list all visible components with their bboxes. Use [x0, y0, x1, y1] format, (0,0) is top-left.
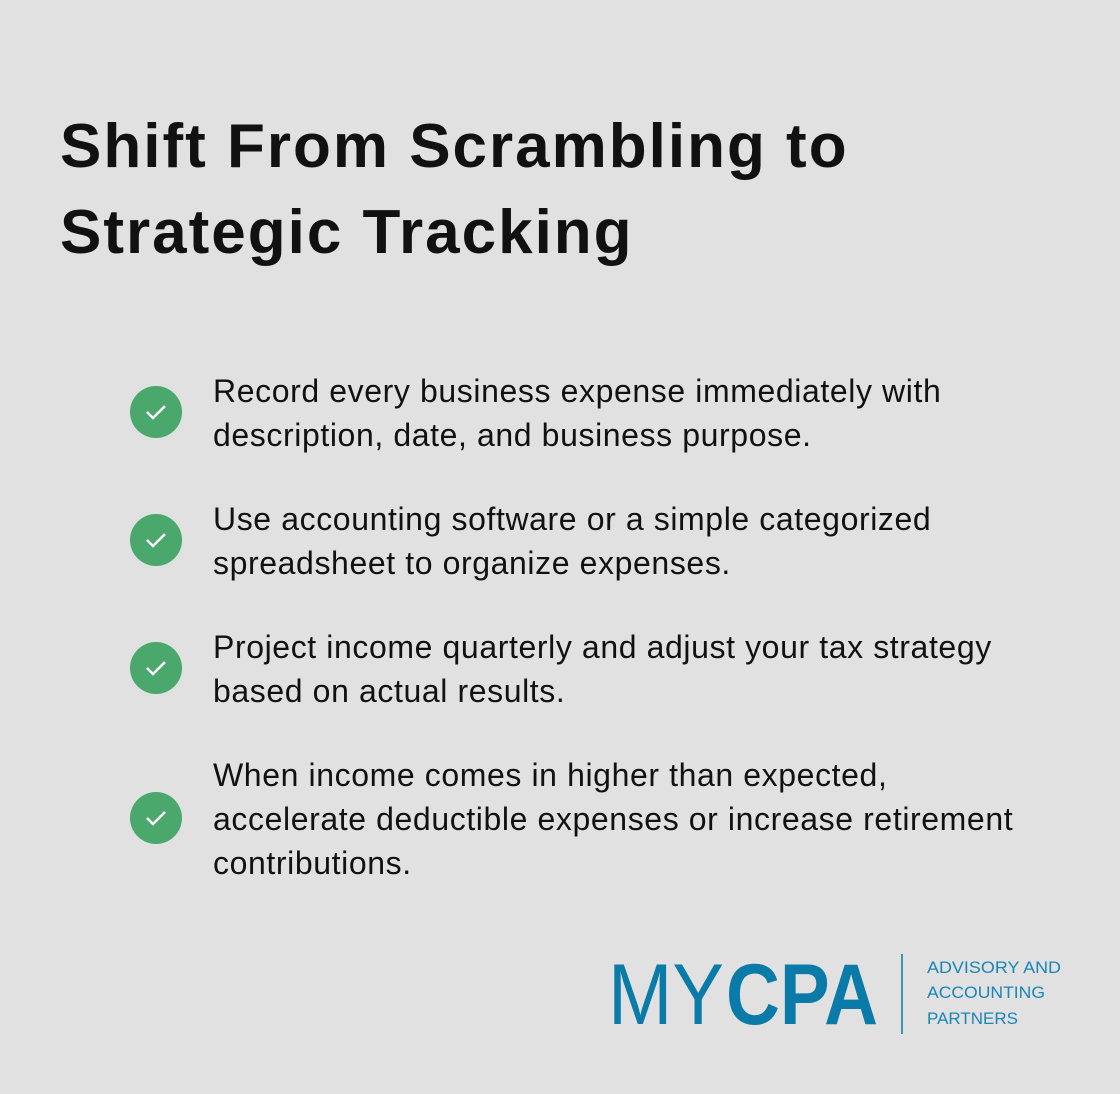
- title: Strategic Tracking: [60, 198, 634, 267]
- item 4: [130, 757, 1013, 881]
- title: Shift From Scrambling to: [60, 112, 849, 181]
- text: [213, 757, 1013, 881]
- title: [60, 112, 849, 267]
- icon: check: [130, 386, 182, 438]
- item 2: [130, 501, 931, 581]
- text: Project income quarterly and adjust your tax strategy: [213, 629, 992, 665]
- text: contributions.: [213, 845, 412, 881]
- text: When income comes in higher than expected,: [213, 757, 887, 793]
- icon: check: [130, 514, 182, 566]
- text: Record every business expense immediately with: [213, 373, 941, 409]
- text: based on actual results.: [213, 673, 565, 709]
- item 1: [130, 373, 941, 453]
- logo: ADVISORY AND: [927, 959, 1061, 977]
- text: [213, 373, 941, 453]
- item 3: [130, 629, 992, 709]
- logo: PARTNERS: [927, 1010, 1018, 1028]
- text: accelerate deductible expenses or increase retirement: [213, 801, 1013, 837]
- text: [213, 629, 992, 709]
- text: [213, 501, 931, 581]
- logo: [608, 952, 1061, 1036]
- icon: check: [130, 642, 182, 694]
- icon: check: [130, 792, 182, 844]
- text: description, date, and business purpose.: [213, 417, 812, 453]
- text: spreadsheet to organize expenses.: [213, 545, 731, 581]
- logo: ACCOUNTING: [927, 984, 1045, 1002]
- text: Use accounting software or a simple categorized: [213, 501, 931, 537]
